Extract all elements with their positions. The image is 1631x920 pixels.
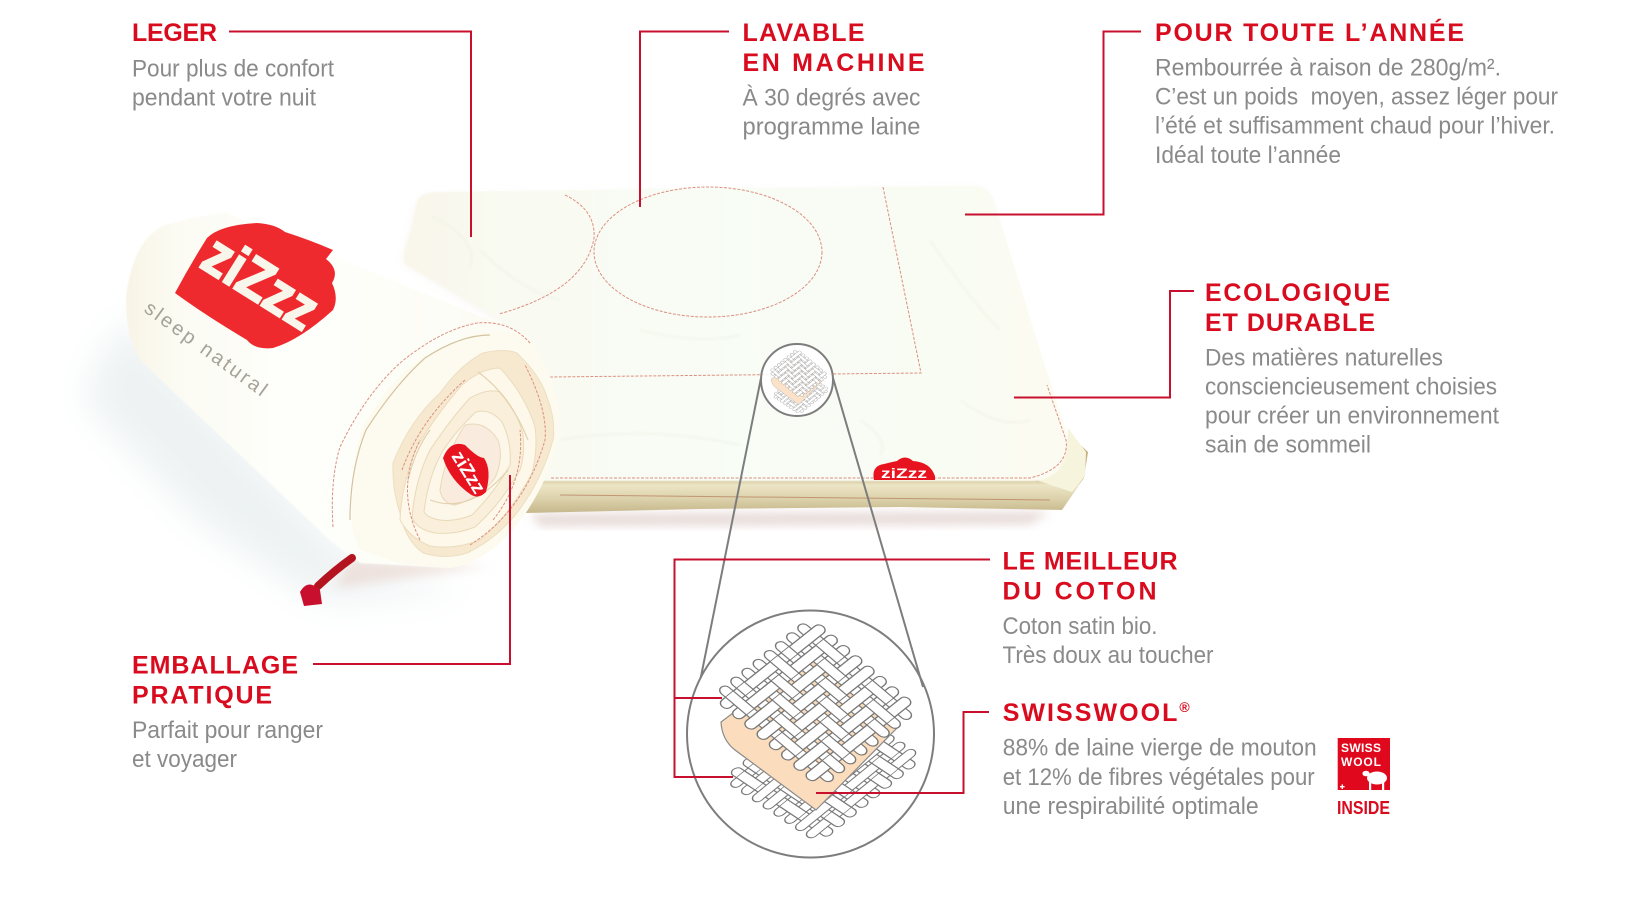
text block: emballage: PRATIQUE xyxy=(132,682,272,710)
text block: pour toute l'annee: Rembourrée à raison de 280g/m². xyxy=(1155,54,1501,82)
quilt lower layers xyxy=(526,440,1088,513)
text block: ecologique xyxy=(1205,279,1499,458)
big magnifier circle with fabric layers xyxy=(687,610,934,858)
text block: pour toute l'annee: POUR TOUTE L’ANNÉE xyxy=(1155,18,1464,47)
text block: pour toute l'annee xyxy=(1155,18,1558,169)
icon: swisswool inside badge xyxy=(1337,738,1390,818)
text block: lavable: LAVABLE xyxy=(742,19,864,47)
roll front face xyxy=(332,323,560,568)
text block: lavable xyxy=(742,19,924,140)
icon: sheep xyxy=(1340,771,1387,790)
text block: lavable: EN MACHINE xyxy=(742,49,924,77)
text block: ecologique: sain de sommeil xyxy=(1205,432,1371,458)
text block: ecologique: consciencieusement choisies xyxy=(1205,374,1497,400)
small magnifier circle xyxy=(761,344,833,416)
photo: rolled quilt in bag xyxy=(85,212,560,606)
zoom loupe xyxy=(687,344,934,858)
text block: swisswool: et 12% de fibres végétales pour xyxy=(1003,764,1315,791)
text block: pour toute l'annee: C’est un poids moyen, assez léger pour xyxy=(1155,84,1558,110)
callout line: emballage xyxy=(313,475,510,664)
icon: swisswool inside badge: WOOL xyxy=(1341,755,1381,769)
red bag logo: ziZzz xyxy=(191,222,331,343)
loupe tangent lines xyxy=(701,378,923,687)
text block: swisswool xyxy=(1003,699,1317,820)
text block: lavable: programme laine xyxy=(742,114,920,140)
text block: ecologique: Des matières naturelles xyxy=(1205,344,1443,372)
text block: emballage: et voyager xyxy=(132,746,237,773)
text block: le meilleur du coton: Coton satin bio. xyxy=(1002,613,1158,640)
text block: emballage xyxy=(132,652,323,773)
callout line: ecologique xyxy=(1014,291,1194,398)
text block: le meilleur du coton: Très doux au toucher xyxy=(1002,642,1214,669)
text block: leger xyxy=(132,19,334,112)
callout line: lavable xyxy=(640,32,729,207)
text block: lavable: À 30 degrés avec xyxy=(742,84,920,112)
icon: swisswool inside badge: INSIDE xyxy=(1337,798,1390,818)
text block: le meilleur du coton: DU COTON xyxy=(1002,578,1156,606)
callout line: swisswool xyxy=(816,712,989,793)
callout line: leger xyxy=(229,32,471,237)
text block: le meilleur du coton: LE MEILLEUR xyxy=(1002,548,1178,576)
photo: folded quilt xyxy=(404,186,1088,526)
bag slogan: sleep natural xyxy=(140,297,271,401)
quilt label xyxy=(873,458,935,481)
text block: swisswool: 88% de laine vierge de mouton xyxy=(1003,734,1317,762)
bag body xyxy=(126,212,533,568)
callout line: pour toute l'annee xyxy=(965,32,1141,214)
text block: ecologique: ET DURABLE xyxy=(1205,309,1375,337)
text block: pour toute l'annee: l’été et suffisamment chaud pour l’hiver. xyxy=(1155,112,1555,140)
small red label in roll: ziZzz xyxy=(447,448,489,498)
text block: leger: LEGER xyxy=(132,19,217,47)
quilt label: ziZzz xyxy=(881,465,927,481)
quilt stitching xyxy=(499,187,1066,478)
text block: ecologique: ECOLOGIQUE xyxy=(1205,279,1390,307)
icon: swisswool inside badge: SWISS xyxy=(1341,741,1381,755)
text block: le meilleur du coton xyxy=(1002,548,1214,669)
text block: swisswool: ® xyxy=(1179,699,1190,715)
text block: pour toute l'annee: Idéal toute l’année xyxy=(1155,142,1341,169)
drawstring cord xyxy=(300,558,352,606)
quilt top surface xyxy=(404,186,1067,481)
text block: leger: pendant votre nuit xyxy=(132,84,316,112)
text block: emballage: EMBALLAGE xyxy=(132,652,298,680)
text block: swisswool: une respirabilité optimale xyxy=(1003,793,1259,820)
text block: leger: Pour plus de confort xyxy=(132,56,334,82)
text block: swisswool: SWISSWOOL xyxy=(1003,699,1177,727)
text block: ecologique: pour créer un environnement xyxy=(1205,402,1499,430)
callout line: coton xyxy=(674,560,990,777)
bag shadow xyxy=(85,320,470,600)
text block: emballage: Parfait pour ranger xyxy=(132,717,323,744)
